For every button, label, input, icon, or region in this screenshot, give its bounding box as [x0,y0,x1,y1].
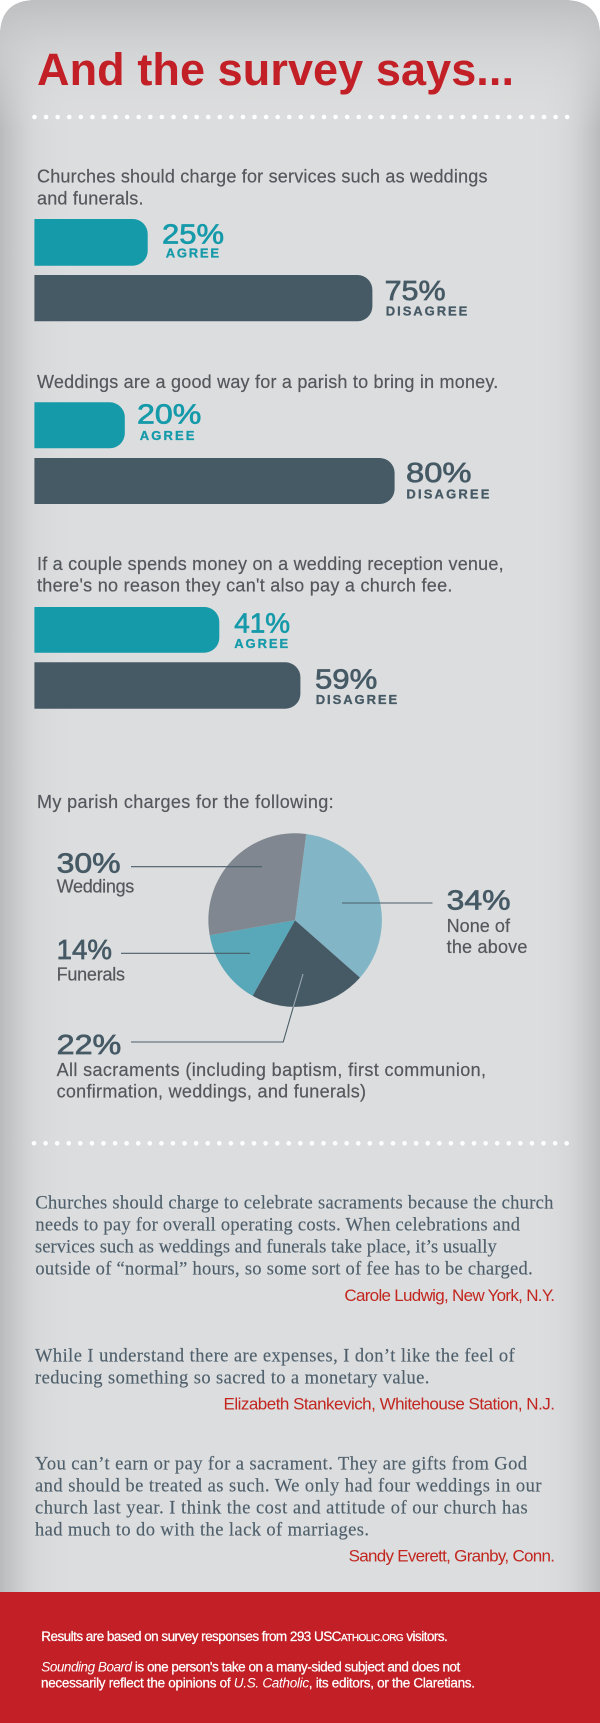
pie chart [208,833,382,1007]
callout: 14% funerals: Funerals [57,965,125,985]
callout: 30% weddings [57,847,262,897]
value: 80% disagree: 80% [406,457,472,488]
value: 25% agree [162,218,224,261]
footer band [0,1592,600,1723]
value: 59% disagree: 59% [315,663,377,694]
panel: question 2 [34,372,498,504]
value: 20% agree [137,398,201,443]
callout: 34% none of the above: None of [447,916,511,936]
callout: 30% weddings: 30% [57,847,121,878]
footer text: survey note: Results are based on survey responses from 293 USCATHOLIC.ORG visitors. [41,1629,448,1644]
value: 41% agree: 41% [234,608,290,639]
callout: 22% all sacraments: confirmation, weddings, and funerals) [57,1082,366,1102]
callout: 34% none of the above [342,884,527,957]
value: 20% agree: 20% [137,398,201,429]
quote 3 [35,1454,555,1565]
bar: disagree 59% [34,662,300,709]
callout: 14% funerals: 14% [57,934,112,965]
attribution 3: Sandy Everett, Granby, Conn. [349,1546,555,1565]
callout: 22% all sacraments: 22% [57,1029,121,1060]
attribution 1: Carole Ludwig, New York, N.Y. [344,1286,555,1305]
quote 2: While I understand there are expenses, I don’t like the feel of [35,1346,516,1366]
quote 1: services such as weddings and funerals take place, it’s usually [35,1238,497,1258]
bar: disagree 75% [34,275,372,321]
bar: agree 20% [34,402,125,448]
quote 1: outside of “normal” hours, so some sort of fee has to be charged. [35,1260,533,1280]
question text 4: My parish charges for the following: [37,792,334,812]
value: 41% agree: AGREE [234,636,289,651]
value: 20% agree: AGREE [140,428,195,443]
quote 1: Churches should charge to celebrate sacraments because the church [35,1194,553,1214]
attribution 2: Elizabeth Stankevich, Whitehouse Station, N.J. [224,1395,555,1414]
value: 59% disagree [315,663,398,707]
bar: agree 41% [34,607,219,653]
question text 1: Churches should charge for services such as weddings [37,167,488,187]
value: 25% agree: AGREE [166,246,219,261]
callout: 34% none of the above: the above [447,937,527,957]
question text 3: there's no reason they can't also pay a church fee. [37,576,452,596]
footer text: disclaimer: necessarily reflect the opinions of U.S. Catholic, its editors, or the Claretians. [41,1676,475,1690]
callout: 30% weddings: Weddings [57,877,134,897]
value: 59% disagree: DISAGREE [316,692,398,707]
quote 3: church last year. I think the cost and attitude of our church has [35,1499,528,1519]
panel: question 3 [34,554,504,709]
quote 1 [35,1194,555,1305]
value: 80% disagree: DISAGREE [406,487,490,502]
footer text: disclaimer: Sounding Board is one person's take on a many-sided subject and does not [41,1659,460,1674]
quote 3: had much to do with the lack of marriages. [35,1521,369,1541]
question text 3: If a couple spends money on a wedding reception venue, [37,554,504,574]
question text 1: and funerals. [37,189,144,209]
callout: 14% funerals [57,934,250,985]
value: 75% disagree [385,275,468,319]
quote 1: needs to pay for overall operating costs. When celebrations and [35,1216,521,1236]
callout: 34% none of the above: 34% [447,884,510,915]
panel: question 1 [34,167,488,321]
callout: 22% all sacraments [57,974,486,1102]
value: 75% disagree: 75% [385,275,446,306]
quote 3: You can’t earn or pay for a sacrament. They are gifts from God [35,1454,528,1474]
callout: 22% all sacraments: All sacraments (including baptism, first communion, [57,1060,486,1080]
bar: disagree 80% [34,458,395,504]
value: 25% agree: 25% [162,218,224,249]
quote 3: and should be treated as such. We only had four weddings in our [35,1476,542,1496]
quote 2: reducing something so sacred to a monetary value. [35,1368,429,1388]
panel: pie chart section [37,792,527,1102]
value: 80% disagree [406,457,490,502]
bar: agree 25% [34,219,148,266]
value: 75% disagree: DISAGREE [386,304,468,319]
question text 2: Weddings are a good way for a parish to bring in money. [37,372,498,392]
title: And the survey says... [37,44,514,95]
quote 2 [35,1346,555,1414]
